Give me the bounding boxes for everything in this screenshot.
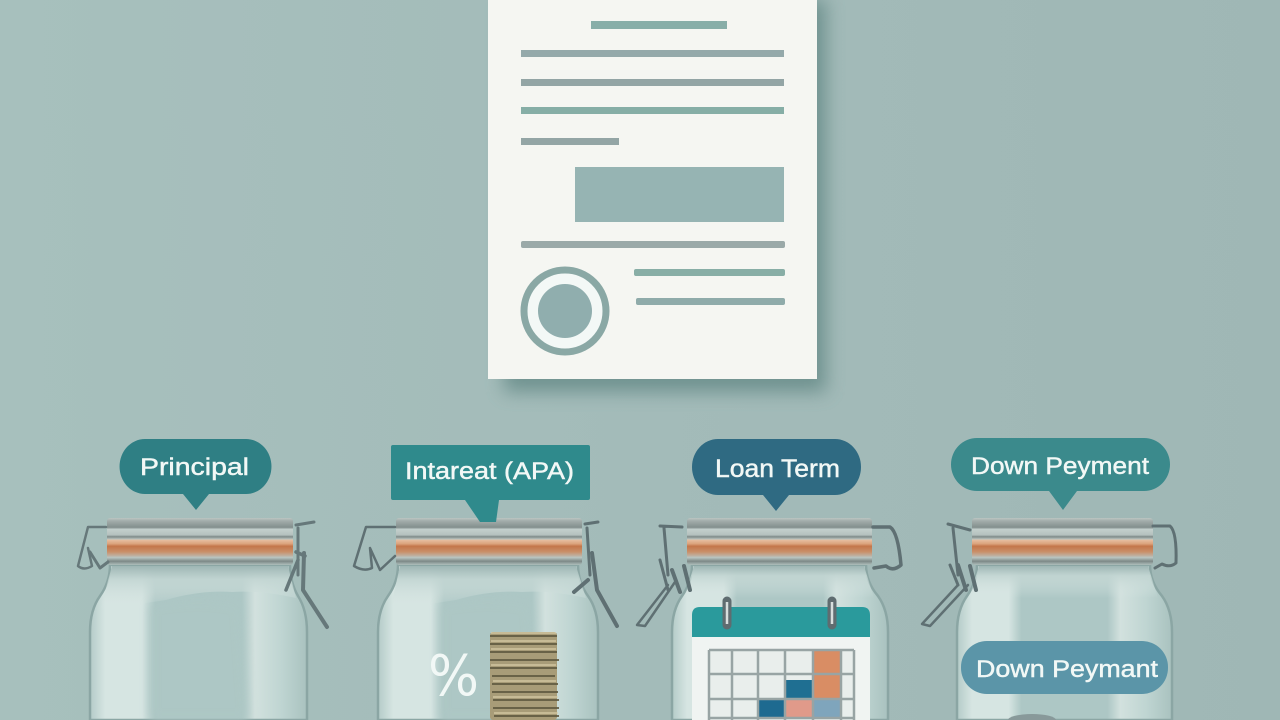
- loan document: [488, 0, 826, 392]
- label: loan term: [692, 439, 861, 511]
- inner down payment label: [961, 641, 1168, 694]
- document seal: [524, 270, 606, 352]
- label: loan term: Loan Term: [715, 455, 840, 483]
- jar 2: interest: [354, 518, 617, 720]
- percent symbol: %: [428, 644, 479, 709]
- coin stack: [490, 632, 559, 720]
- document highlighted box: [575, 167, 784, 222]
- calendar: [692, 601, 870, 720]
- jar 4 glass: [957, 565, 1172, 720]
- jar 4 bottom object: [1008, 714, 1056, 720]
- jar 2 clasps: [354, 522, 617, 626]
- label: down payment: [951, 438, 1170, 510]
- jar 3 clasps: [637, 526, 901, 626]
- label: down payment: Down Peyment: [971, 453, 1149, 480]
- jar 2 glass: [378, 565, 598, 720]
- jar 3 lid: [687, 518, 872, 565]
- jar 1 lid: [107, 518, 293, 565]
- jar 4 clasps: [922, 524, 1176, 626]
- jar 2 lid: [396, 518, 582, 565]
- calendar rings: [727, 601, 832, 625]
- jar 4 lid: [972, 518, 1153, 565]
- jar 1: principal: [78, 518, 327, 720]
- jar 1 glass: [90, 565, 307, 720]
- label: interest: Intareat (APA): [405, 458, 574, 485]
- label: principal: Principal: [140, 454, 249, 481]
- inner down payment label: Down Peymant: [976, 656, 1158, 683]
- jar 3 glass: [672, 565, 888, 720]
- label: interest: [391, 445, 590, 522]
- jar 1 clasps: [78, 522, 327, 627]
- jar 3: loan term: [637, 518, 901, 720]
- label: principal: [120, 439, 271, 510]
- jar 4: down payment: [922, 518, 1176, 720]
